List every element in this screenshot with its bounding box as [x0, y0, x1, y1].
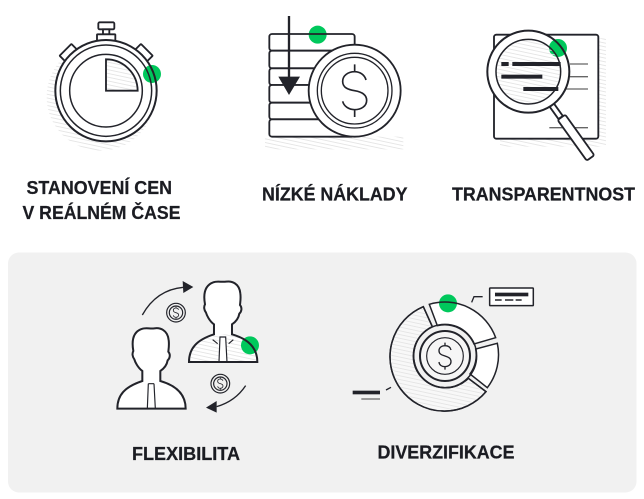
callout: top right label — [472, 288, 533, 306]
icon: magnifier over document — [487, 31, 606, 161]
heading: flexibilita: FLEXIBILITA — [132, 443, 240, 464]
heading: transparentnost: TRANSPARENTNOST — [452, 184, 636, 204]
heading: diverzifikace: DIVERZIFIKACE — [378, 442, 514, 462]
heading: stanovení cen v reálném čase — [22, 177, 180, 223]
person: right — [189, 281, 259, 362]
panel: lower background — [8, 252, 636, 492]
person: left — [117, 328, 186, 409]
heading: stanovení cen v reálném čase: STANOVENÍ CEN — [26, 177, 172, 198]
callout: left label — [353, 387, 391, 399]
icon: stopwatch — [47, 22, 161, 151]
heading: stanovení cen v reálném čase: V REÁLNÉM ČASE — [22, 202, 180, 223]
icon: two people exchanging money — [117, 281, 259, 413]
icon: coin stack with down arrow — [265, 16, 403, 149]
icon: donut chart with dollar — [353, 288, 533, 411]
heading: nízké náklady: NÍZKÉ NÁKLADY — [262, 184, 408, 204]
